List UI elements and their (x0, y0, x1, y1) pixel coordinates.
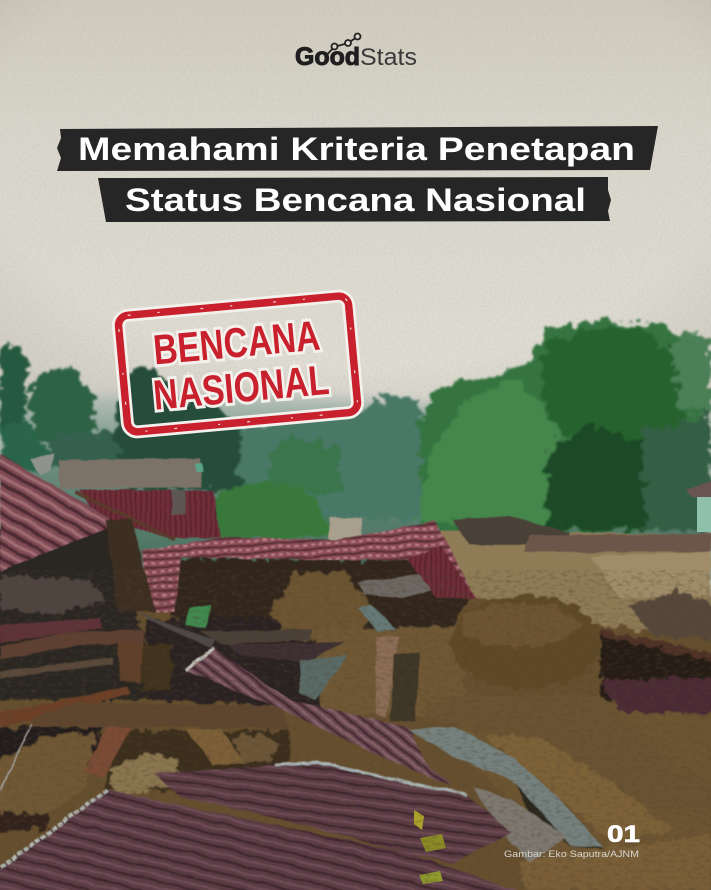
green house on the right (686, 481, 711, 532)
mud and debris base layer (0, 520, 711, 890)
grain texture (0, 570, 711, 890)
red tiled roof on the left (0, 453, 175, 572)
photo: flood-damaged landscape (0, 320, 711, 890)
stamp text line 1: BENCANA (151, 312, 322, 374)
wooden planks and posts (0, 605, 420, 790)
page number: 01 (607, 821, 640, 848)
title banner line 1 (57, 126, 658, 171)
logo: GoodStats (295, 34, 417, 71)
photo credit: Gambar: Eko Saputra/AJNM (504, 849, 639, 860)
stamp text line 2: NASIONAL (151, 356, 331, 419)
central collapsed tiled roof (106, 519, 476, 612)
logo chart line icon (325, 34, 360, 57)
diagonal roof sheet (186, 648, 453, 787)
mud mound (423, 595, 711, 890)
logo: GoodStats: Good (295, 43, 360, 71)
title banner line 1: Memahami Kriteria Penetapan (78, 131, 635, 167)
title banner line 2: Status Bencana Nasional (125, 182, 586, 218)
paper background (0, 0, 711, 520)
grey metal sheet (408, 726, 603, 863)
title banner line 2 (98, 177, 611, 222)
foreground maroon roofs (0, 762, 521, 890)
logo: GoodStats: Stats (360, 44, 417, 71)
distant house on the left (59, 458, 220, 538)
ground behind rubble (329, 516, 711, 650)
yellow leaves (414, 810, 446, 884)
forest and mist (0, 320, 711, 580)
stamp: Bencana Nasional (118, 295, 358, 433)
